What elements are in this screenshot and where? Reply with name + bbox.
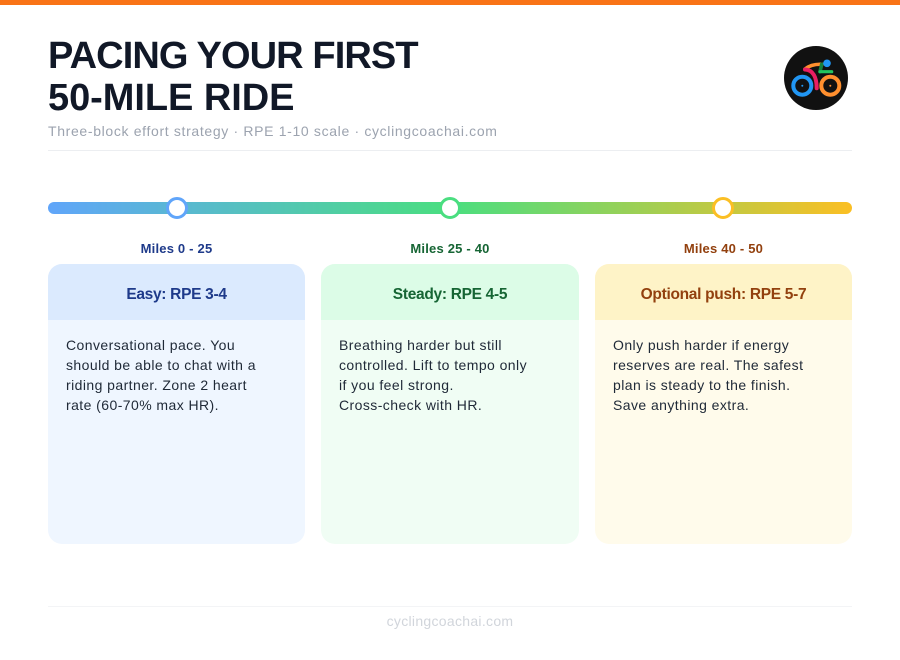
heading: steady	[321, 264, 579, 320]
text: steady description	[339, 337, 527, 413]
heading: optional push: Optional push: RPE 5-7	[641, 286, 806, 303]
text: steady description: controlled. Lift to tempo only	[339, 357, 527, 373]
text: optional push description: plan is steady to the finish.	[613, 377, 790, 393]
heading: steady: Steady: RPE 4-5	[393, 286, 507, 303]
heading: easy: Easy: RPE 3-4	[126, 286, 227, 303]
text: optional push description	[613, 337, 803, 413]
effort progress track	[48, 202, 852, 214]
text: easy description: Conversational pace. You	[66, 337, 235, 353]
text: optional push description: Save anything extra.	[613, 397, 749, 413]
top accent bar	[0, 0, 900, 5]
text: optional push description: reserves are real. The safest	[613, 357, 803, 373]
label: miles 40-50: Miles 40 - 50	[684, 241, 763, 256]
heading: optional push	[595, 264, 852, 320]
header divider	[48, 150, 852, 151]
footer divider	[48, 606, 852, 607]
marker: miles 40	[439, 197, 461, 219]
footer text: cyclingcoachai.com	[387, 613, 513, 629]
panel: steady	[321, 264, 579, 544]
label: miles 25-40: Miles 25 - 40	[410, 241, 490, 256]
text: steady description: Breathing harder but still	[339, 337, 502, 353]
panel: optional push	[595, 264, 852, 544]
text: easy description: riding partner. Zone 2 heart	[66, 377, 247, 393]
title	[48, 35, 418, 119]
subtitle: Three-block effort strategy · RPE 1-10 scale · cyclingcoachai.com	[48, 123, 498, 139]
text: optional push description: Only push harder if energy	[613, 337, 789, 353]
text: easy description	[66, 337, 256, 413]
title: 50-MILE RIDE	[48, 77, 294, 119]
marker: miles 25	[166, 197, 188, 219]
text: steady description: if you feel strong.	[339, 377, 454, 393]
label: miles 0-25: Miles 0 - 25	[141, 241, 212, 256]
text: easy description: rate (60-70% max HR).	[66, 397, 219, 413]
text: easy description: should be able to chat with a	[66, 357, 256, 373]
icon: cyclist logo	[784, 46, 848, 110]
title: PACING YOUR FIRST	[48, 35, 418, 77]
text: steady description: Cross-check with HR.	[339, 397, 482, 413]
panel: easy	[48, 264, 305, 544]
marker: miles 50	[712, 197, 734, 219]
heading: easy	[48, 264, 305, 320]
